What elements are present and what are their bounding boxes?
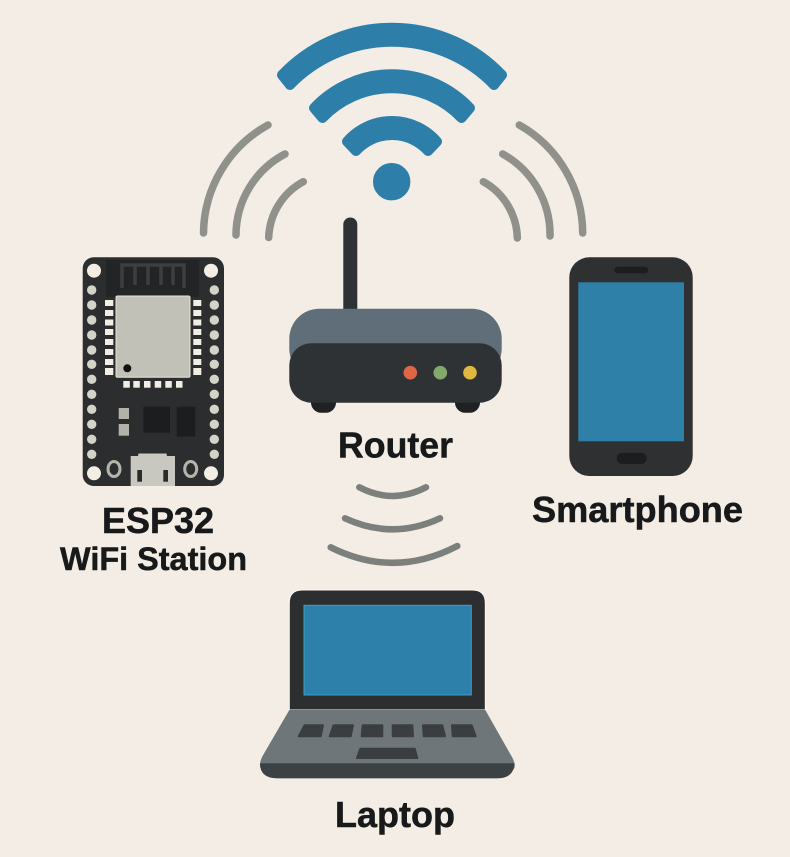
label: Laptop: Laptop bbox=[335, 794, 455, 835]
icon: ESP32 board bbox=[83, 257, 224, 486]
icon: left signal arcs toward ESP32 bbox=[204, 125, 303, 238]
icon: smartphone bbox=[569, 257, 693, 476]
icon: central wifi symbol bbox=[282, 28, 502, 195]
label: Smartphone: Smartphone bbox=[532, 489, 743, 530]
icon: laptop bbox=[260, 590, 515, 778]
label: WiFi Station: WiFi Station bbox=[60, 541, 247, 577]
icon: router bbox=[289, 218, 502, 413]
label: Router: Router bbox=[338, 424, 453, 466]
icon: right signal arcs toward smartphone bbox=[483, 125, 583, 238]
icon: signal arcs toward laptop bbox=[331, 487, 457, 563]
label: ESP32: ESP32 bbox=[102, 500, 214, 541]
